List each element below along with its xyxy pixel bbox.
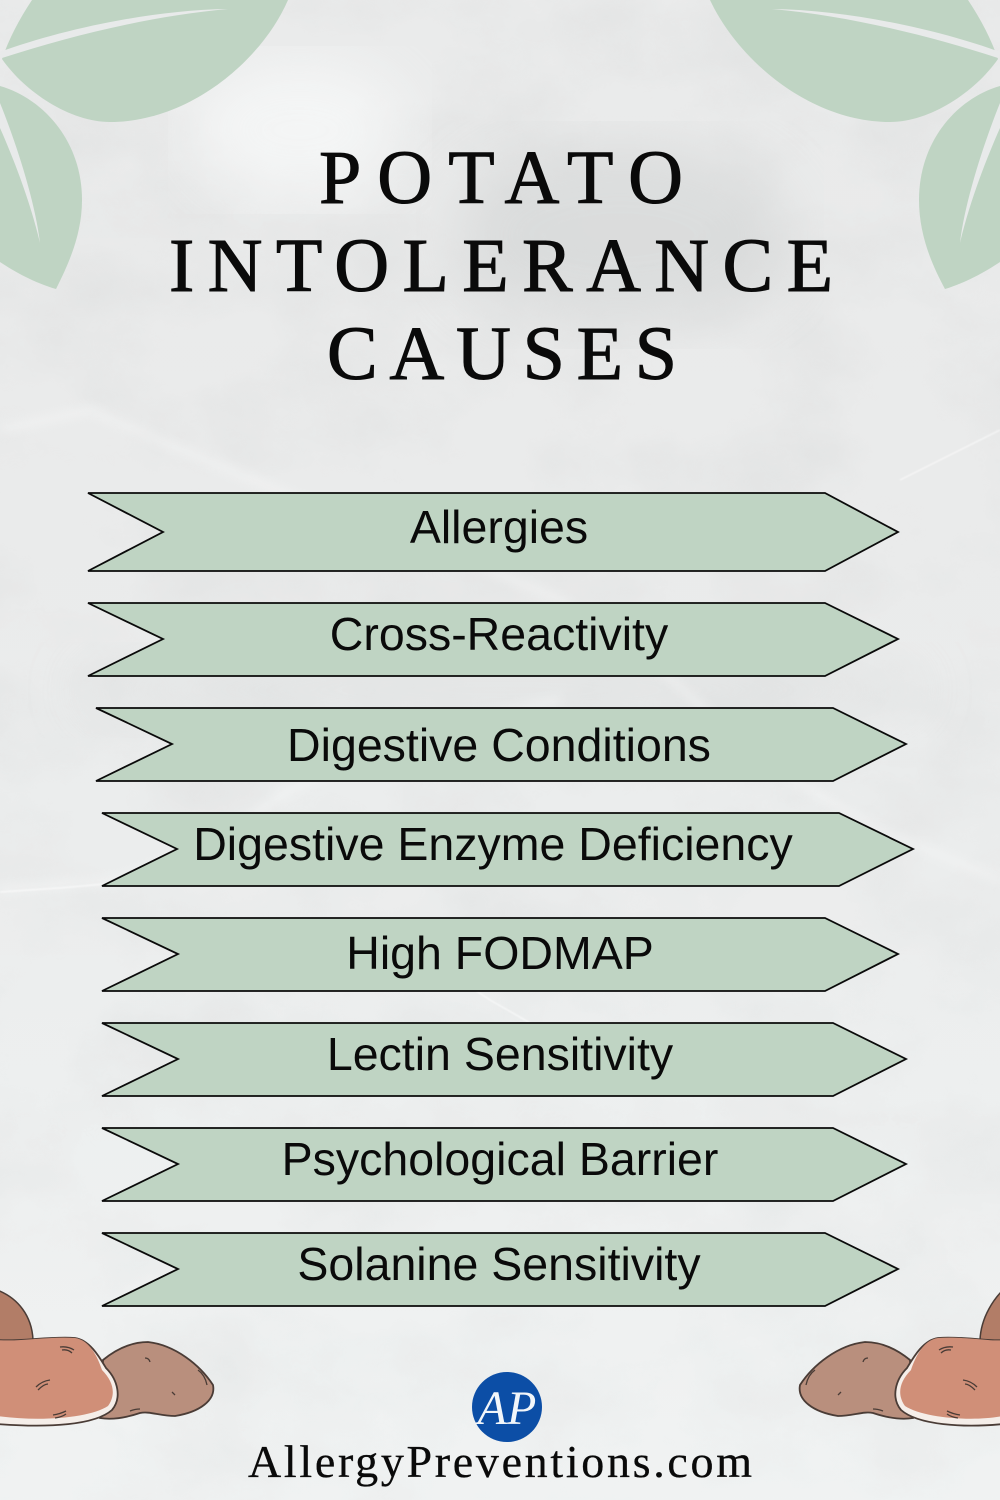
ribbon: Lectin Sensitivity: Lectin Sensitivity bbox=[327, 1028, 674, 1080]
ribbon: High FODMAP bbox=[102, 918, 898, 991]
ribbon: Psychological Barrier bbox=[102, 1128, 906, 1201]
title: INTOLERANCE bbox=[169, 224, 833, 308]
icon: small leaf left bbox=[0, 86, 82, 289]
causes list bbox=[88, 493, 913, 1306]
ribbon: Cross-Reactivity: Cross-Reactivity bbox=[330, 608, 669, 660]
title: POTATO bbox=[319, 136, 683, 220]
large potato bbox=[0, 1338, 113, 1419]
icon: small leaf right bbox=[919, 86, 1000, 289]
icon: large leaf top left bbox=[2, 0, 288, 122]
large potato halo bbox=[895, 1338, 1000, 1426]
ribbon: Allergies: Allergies bbox=[410, 501, 588, 553]
ribbon: Solanine Sensitivity: Solanine Sensitivity bbox=[297, 1238, 701, 1290]
potato marks bbox=[36, 1345, 207, 1418]
large potato halo bbox=[0, 1338, 118, 1426]
ribbon: Digestive Conditions bbox=[96, 708, 906, 781]
website footer: AllergyPreventions.com bbox=[248, 1436, 752, 1487]
icon: potatoes bottom right bbox=[800, 1290, 1000, 1426]
leaves: top right bbox=[710, 0, 1000, 289]
ribbon: Digestive Conditions: Digestive Conditions bbox=[287, 719, 711, 771]
ribbon: Psychological Barrier: Psychological Barrier bbox=[282, 1133, 718, 1185]
ribbon: High FODMAP: High FODMAP bbox=[346, 927, 654, 979]
large potato bbox=[900, 1338, 1000, 1419]
title bbox=[169, 136, 833, 396]
ribbon: Solanine Sensitivity bbox=[102, 1233, 898, 1306]
ribbon: Digestive Enzyme Deficiency bbox=[102, 813, 913, 886]
leaves: top left bbox=[0, 0, 288, 289]
small potato bbox=[800, 1342, 913, 1419]
potato marks bbox=[806, 1345, 977, 1418]
icon: large leaf top right bbox=[710, 0, 998, 122]
logo badge: AP bbox=[475, 1382, 536, 1435]
back potato bbox=[0, 1290, 33, 1342]
ribbon: Cross-Reactivity bbox=[88, 603, 898, 676]
small potato bbox=[100, 1342, 213, 1419]
title: CAUSES bbox=[327, 312, 677, 396]
leaf vein right bbox=[960, 103, 1000, 243]
leaf vein top bbox=[0, 9, 228, 58]
ribbon: Digestive Enzyme Deficiency: Digestive Enzyme Deficiency bbox=[193, 818, 794, 870]
logo badge bbox=[472, 1372, 542, 1442]
icon: potatoes bottom left bbox=[0, 1290, 213, 1426]
leaf vein top right bbox=[772, 9, 1000, 58]
back potato bbox=[980, 1290, 1000, 1342]
ribbon: Allergies bbox=[88, 493, 898, 571]
leaf vein left bbox=[0, 103, 40, 243]
ribbon: Lectin Sensitivity bbox=[102, 1023, 906, 1096]
